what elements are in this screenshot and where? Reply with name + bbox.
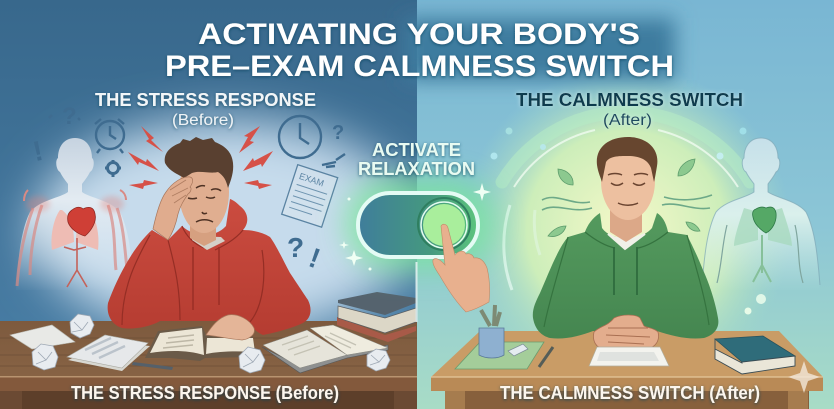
title: ACTIVATING YOUR BODY'S [198, 18, 640, 51]
person: calm student [533, 137, 718, 351]
icon: corner sparkle [788, 361, 820, 393]
icon: red lightning bolts [128, 126, 273, 189]
label: activate relaxation: ACTIVATE [372, 140, 461, 160]
open book center [145, 326, 257, 361]
book stack [337, 317, 416, 342]
eraser [508, 344, 528, 356]
face [179, 151, 229, 233]
resting hand on book [206, 315, 254, 340]
green mat [455, 342, 544, 369]
title: PRE–EXAM CALMNESS SWITCH [165, 50, 674, 83]
desk items: calm [455, 305, 795, 374]
hoodie: green [533, 213, 718, 339]
caption: calmness switch: THE CALMNESS SWITCH (After) [500, 383, 760, 403]
t-shirt collar [608, 234, 645, 249]
neck [190, 222, 216, 246]
label: activate relaxation: RELAXATION [358, 159, 475, 179]
icon: question and exclamation marks: ? [62, 103, 77, 130]
icon: exam paper: EXAM [298, 171, 325, 188]
raised hand [153, 177, 193, 240]
hoodie: red [108, 199, 311, 335]
icon: question and exclamation marks: ? [332, 122, 344, 144]
panel: calm background [417, 0, 834, 409]
crumpled paper balls [32, 314, 390, 373]
title [165, 18, 674, 83]
closed eyes, brows and smile [608, 174, 648, 205]
heading: calmness switch [516, 90, 743, 129]
heading: stress response: THE STRESS RESPONSE [95, 90, 316, 110]
hoodie strings [193, 247, 219, 310]
heading: stress response: (Before) [172, 112, 234, 129]
hoodie strings [614, 247, 637, 295]
icon: exam paper [282, 165, 338, 227]
icon: question and exclamation marks: ? [287, 232, 304, 263]
calm aura arcs [490, 112, 766, 314]
loose papers [10, 325, 75, 349]
heading: calmness switch: (After) [603, 112, 652, 129]
icon: stress symbols [49, 115, 345, 177]
toggle glow [345, 178, 495, 270]
open book right [262, 345, 388, 373]
hair [597, 137, 657, 182]
person: stressed student [108, 137, 311, 335]
icon: activation toggle switch [358, 193, 478, 257]
icon: question and exclamation marks: ! [30, 135, 46, 167]
table: stress desk [0, 321, 417, 409]
t-shirt collar [192, 236, 225, 250]
icon: question and exclamation marks: ! [305, 242, 324, 274]
pencils [481, 305, 500, 326]
icon: sparkles [339, 183, 491, 270]
desk items: stress [10, 292, 416, 373]
title backdrop glow [405, 18, 675, 80]
closed book [715, 336, 795, 362]
heading: stress response [95, 90, 316, 129]
icon: leaves and calm waves [542, 159, 712, 237]
pen [132, 362, 173, 370]
icon: body with stressed heart [16, 138, 134, 290]
pen cup [479, 328, 504, 358]
neck [610, 208, 642, 242]
label: activate relaxation [358, 140, 475, 179]
caption: stress response: THE STRESS RESPONSE (Before) [71, 383, 339, 403]
icon: calm body with green heart [702, 138, 820, 290]
eyes and mouth [188, 186, 221, 222]
hair [165, 137, 233, 188]
heading: calmness switch: THE CALMNESS SWITCH [516, 90, 743, 110]
panel: stress background [0, 0, 417, 409]
face [601, 142, 655, 220]
pen [539, 347, 553, 367]
clasped hands [593, 315, 658, 351]
table: calm desk [431, 331, 823, 409]
icon: question and exclamation marks [30, 103, 344, 274]
center divider [416, 262, 418, 322]
paper [589, 347, 669, 366]
icon: pressing hand [433, 224, 490, 312]
